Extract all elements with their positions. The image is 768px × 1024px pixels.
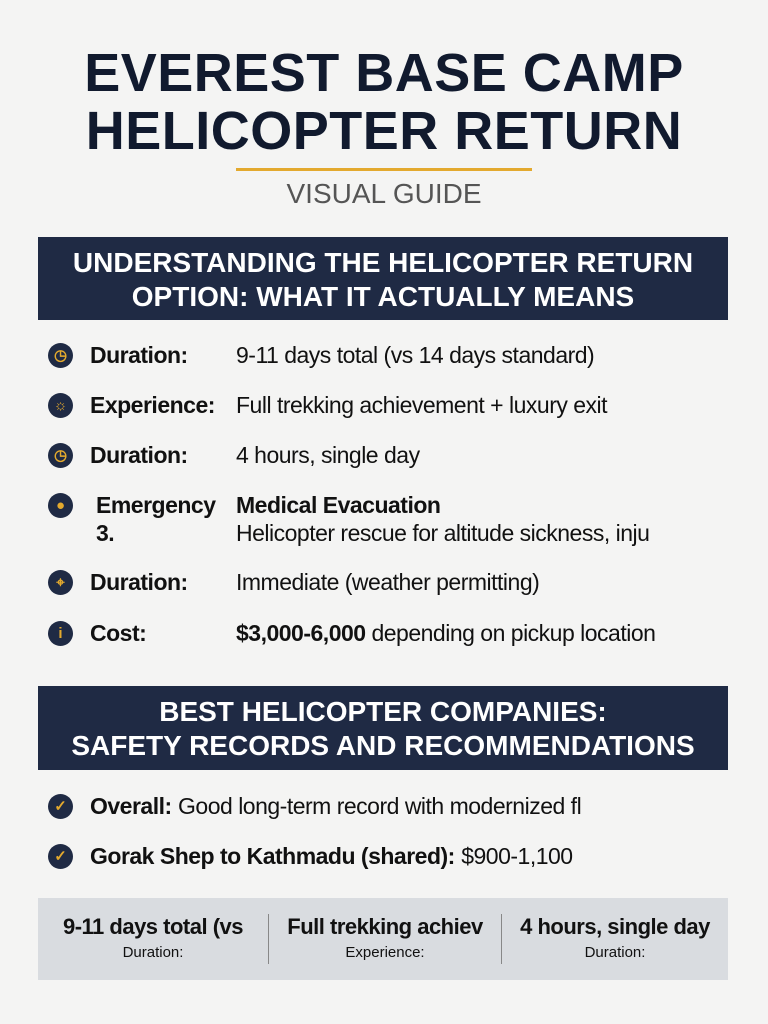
row cost: $3,000-6,000 depending on pickup location <box>236 620 655 646</box>
row emergency: Emergency <box>96 492 216 518</box>
row experience <box>48 392 608 418</box>
row duration 3: Immediate (weather permitting) <box>236 569 539 595</box>
row experience: Experience: <box>90 392 215 418</box>
stat 3: Duration: <box>585 944 645 961</box>
row duration 2: Duration: <box>90 442 188 468</box>
row emergency: Helicopter rescue for altitude sickness, inju <box>236 520 649 546</box>
banner: understanding: OPTION: WHAT IT ACTUALLY MEANS <box>132 281 634 312</box>
stat 2: Experience: <box>345 944 425 961</box>
row emergency: 3. <box>96 520 114 546</box>
banner: understanding: UNDERSTANDING THE HELICOPTER RETURN <box>73 247 693 278</box>
check overall: ✓ <box>54 798 67 815</box>
title: HELICOPTER RETURN <box>86 101 682 161</box>
row duration 3: ⌖ <box>56 574 65 591</box>
row duration 3: Duration: <box>90 569 188 595</box>
row duration 3 <box>48 569 539 595</box>
check gorak: Gorak Shep to Kathmadu (shared): $900-1,100 <box>90 843 573 869</box>
row experience: Full trekking achievement + luxury exit <box>236 392 607 418</box>
list: checks <box>48 793 581 869</box>
row cost <box>48 620 655 646</box>
summary bar <box>38 898 728 980</box>
stat 1: 9-11 days total (vs <box>63 914 243 939</box>
title <box>84 43 684 161</box>
check overall: Overall: Good long-term record with modernized fl <box>90 793 581 819</box>
row duration: ◷ <box>54 347 67 364</box>
row emergency <box>48 492 649 546</box>
stat 3: 4 hours, single day <box>520 914 710 939</box>
divider accent <box>236 168 532 171</box>
banner: companies <box>38 686 728 770</box>
check gorak: ✓ <box>54 848 67 865</box>
row duration 2 <box>48 442 420 468</box>
list: details <box>48 342 655 646</box>
stat 3 <box>520 914 710 961</box>
row duration: 9-11 days total (vs 14 days standard) <box>236 342 594 368</box>
row duration 2: ◷ <box>54 447 67 464</box>
row emergency: ● <box>56 497 65 514</box>
row duration 2: 4 hours, single day <box>236 442 420 468</box>
banner: understanding <box>38 237 728 320</box>
row emergency: Medical Evacuation <box>236 492 440 518</box>
subtitle: VISUAL GUIDE <box>286 178 482 209</box>
banner: companies: BEST HELICOPTER COMPANIES: <box>159 696 607 727</box>
stat 1: Duration: <box>123 944 183 961</box>
row duration: Duration: <box>90 342 188 368</box>
banner: companies: SAFETY RECORDS AND RECOMMENDATIONS <box>71 730 695 761</box>
stat 2: Full trekking achiev <box>287 914 483 939</box>
stat 2 <box>287 914 484 961</box>
row cost: i <box>58 625 63 642</box>
stat 1 <box>63 914 243 961</box>
title: EVEREST BASE CAMP <box>84 43 684 103</box>
row cost: Cost: <box>90 620 146 646</box>
row duration <box>48 342 594 368</box>
row experience: ☼ <box>54 397 67 414</box>
